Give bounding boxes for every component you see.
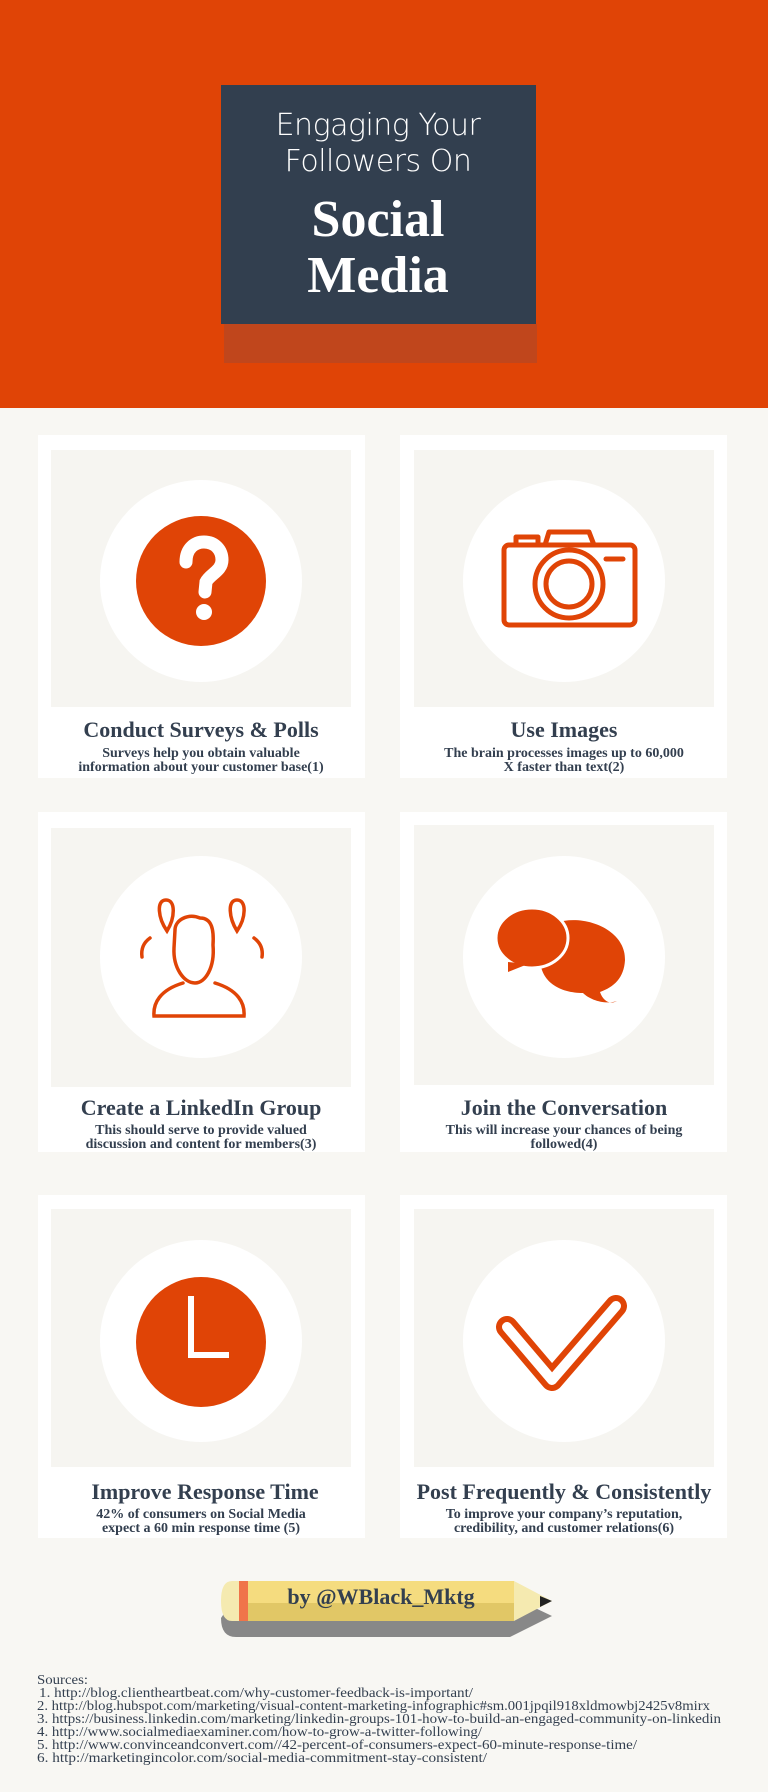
panel: use images: X faster than text(2)	[504, 760, 625, 775]
panel: conduct surveys: Conduct Surveys & Polls	[83, 717, 319, 742]
panel: linkedin group: This should serve to provide valued	[95, 1123, 307, 1138]
panel: linkedin group	[38, 812, 365, 1152]
panel: conduct surveys	[38, 435, 365, 778]
panel: linkedin group: Create a LinkedIn Group	[81, 1095, 321, 1120]
icon: camera	[504, 532, 635, 625]
pencil byline	[221, 1581, 552, 1637]
panel: linkedin group: discussion and content for members(3)	[86, 1137, 317, 1152]
panel: join the conversation: Join the Conversation	[461, 1095, 667, 1120]
title box: Engaging Your	[276, 108, 482, 143]
panel: improve response time: expect a 60 min response time (5)	[102, 1521, 300, 1536]
sources: 6. http://marketingincolor.com/social-media-commitment-stay-consistent/	[37, 1751, 487, 1766]
sources: 3. https://business.linkedin.com/marketing/linkedin-groups-101-how-to-build-an-engaged-community-on-linkedin	[37, 1712, 721, 1727]
sources: 4. http://www.socialmediaexaminer.com/how-to-grow-a-twitter-following/	[37, 1725, 482, 1740]
title box: Media	[307, 247, 449, 304]
icon: clock	[136, 1277, 266, 1407]
sources: 1. http://blog.clientheartbeat.com/why-customer-feedback-is-important/	[39, 1686, 473, 1701]
header band	[0, 0, 768, 408]
title box: Social	[312, 191, 444, 248]
icon: checkmark	[507, 1306, 616, 1380]
title box: Followers On	[285, 144, 471, 179]
sources: 5. http://www.convinceandconvert.com//42-percent-of-consumers-expect-60-minute-response-time/	[37, 1738, 637, 1753]
panel: improve response time	[38, 1195, 365, 1538]
pencil byline: by @WBlack_Mktg	[287, 1584, 475, 1609]
icon: question mark	[136, 516, 266, 646]
sources	[37, 1673, 721, 1766]
panel: post frequently: Post Frequently & Consistently	[417, 1479, 711, 1504]
panel: conduct surveys: Surveys help you obtain valuable	[102, 746, 300, 761]
panel: improve response time: 42% of consumers on Social Media	[96, 1507, 306, 1522]
panel: use images: Use Images	[511, 717, 618, 742]
panel: use images: The brain processes images up to 60,000	[444, 746, 684, 761]
sources: 2. http://blog.hubspot.com/marketing/visual-content-marketing-infographic#sm.001jpqil918xldmowbj2425v8mirx	[37, 1699, 710, 1714]
panel: conduct surveys: information about your customer base(1)	[78, 760, 324, 775]
panel: post frequently: To improve your company’s reputation,	[446, 1507, 682, 1522]
icon: group of people	[142, 900, 262, 1016]
panel: post frequently	[400, 1195, 727, 1538]
panel: improve response time: Improve Response Time	[91, 1479, 319, 1504]
panel: join the conversation: followed(4)	[531, 1137, 598, 1152]
panel: use images	[400, 435, 727, 778]
title box	[221, 85, 536, 324]
icon: speech bubbles	[496, 908, 625, 1003]
title box shadow	[224, 324, 537, 363]
panel: join the conversation	[400, 812, 727, 1152]
sources: Sources:	[37, 1673, 88, 1688]
panel: post frequently: credibility, and customer relations(6)	[454, 1521, 674, 1536]
panel: join the conversation: This will increase your chances of being	[446, 1123, 682, 1138]
